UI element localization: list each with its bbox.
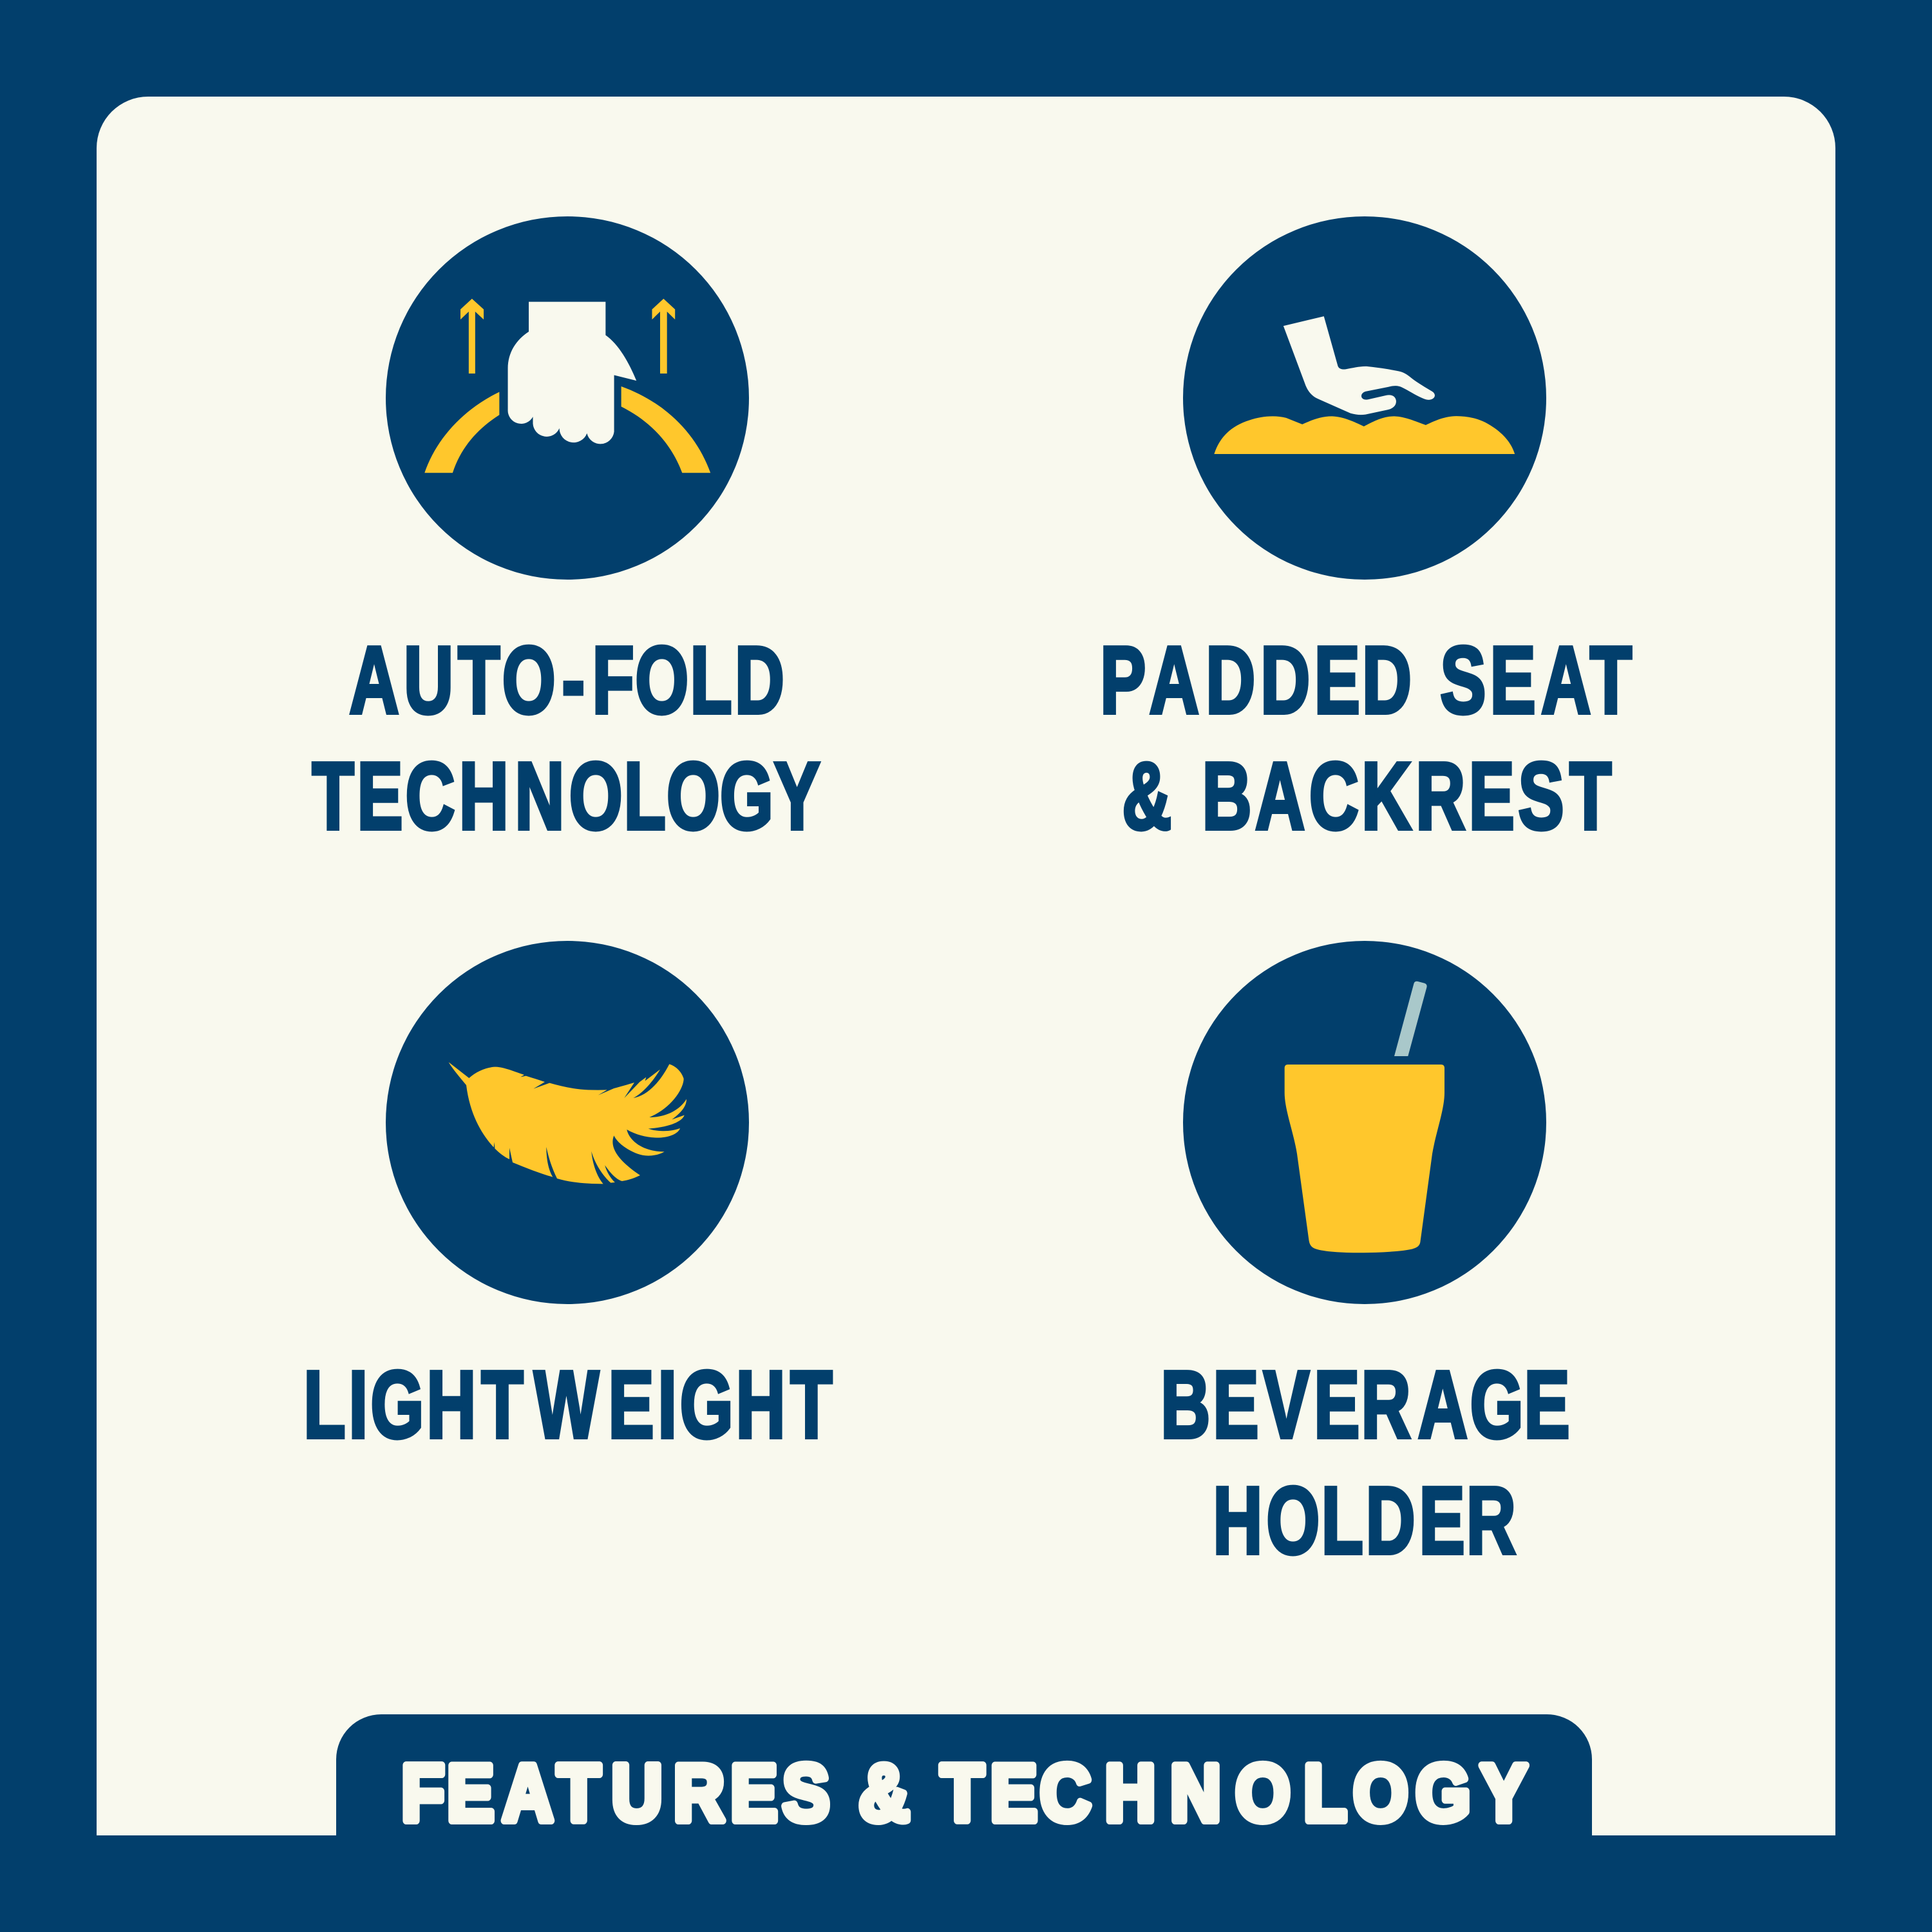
feature: auto-fold technology	[312, 216, 820, 849]
icon: hand pressing cushion	[1183, 216, 1546, 580]
label: auto-fold technology: AUTO-FOLD	[350, 627, 784, 734]
label: beverage holder	[1160, 1352, 1570, 1574]
label: beverage holder: BEVERAGE	[1160, 1352, 1570, 1458]
label: padded seat and backrest: PADDED SEAT	[1100, 627, 1632, 734]
label: auto-fold technology	[312, 627, 820, 849]
tab shape	[336, 1714, 1592, 1835]
title: FEATURES & TECHNOLOGY	[401, 1748, 1528, 1838]
label: lightweight: LIGHTWEIGHT	[303, 1352, 832, 1458]
icon: hand lifting folding chair	[386, 216, 749, 580]
label: padded seat and backrest: & BACKREST	[1122, 743, 1611, 849]
label: auto-fold technology: TECHNOLOGY	[312, 743, 820, 849]
label: padded seat and backrest	[1100, 627, 1632, 849]
label: beverage holder: HOLDER	[1213, 1468, 1516, 1574]
feature: padded seat and backrest	[1100, 216, 1632, 849]
feature: lightweight	[303, 941, 832, 1458]
icon: cup with straw	[1183, 941, 1546, 1304]
title tab	[336, 1714, 1592, 1838]
icon: feather	[386, 941, 749, 1304]
feature: beverage holder	[1160, 941, 1570, 1574]
